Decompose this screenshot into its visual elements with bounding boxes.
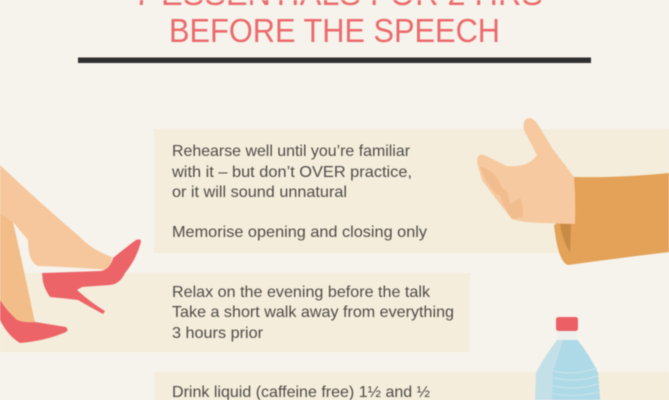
panel: rehearse: with it – but don’t OVER practice, — [171, 164, 412, 181]
icon: hand and sleeve — [477, 118, 669, 265]
ribs — [553, 368, 599, 396]
cap — [556, 317, 578, 331]
fingers — [480, 167, 523, 219]
panel: relax — [0, 273, 470, 352]
sleeve — [554, 173, 669, 265]
neck — [557, 330, 577, 340]
panel: relax: Take a short walk away from everything — [172, 304, 454, 321]
bottle body — [535, 339, 600, 400]
front shoe — [42, 239, 141, 314]
icon: legs in red heels — [0, 165, 141, 343]
sleeve shadow — [560, 224, 571, 252]
panel: relax: 3 hours prior — [172, 325, 263, 342]
icon: water bottle — [535, 317, 600, 400]
panel: rehearse: or it will sound unnatural — [172, 184, 347, 201]
panel: rehearse: Memorise opening and closing only — [172, 224, 427, 241]
title: BEFORE THE SPEECH — [169, 12, 500, 49]
heading rule — [78, 58, 591, 63]
hand — [477, 118, 575, 224]
back shoe — [0, 300, 68, 343]
water shade — [552, 340, 600, 400]
panel: relax: Relax on the evening before the talk — [172, 284, 430, 301]
panel: drink — [154, 372, 669, 400]
back leg — [0, 213, 35, 326]
front leg — [0, 165, 112, 270]
title — [134, 0, 543, 49]
panel: rehearse: Rehearse well until you’re familiar — [172, 143, 410, 160]
panel: rehearse — [154, 129, 669, 253]
